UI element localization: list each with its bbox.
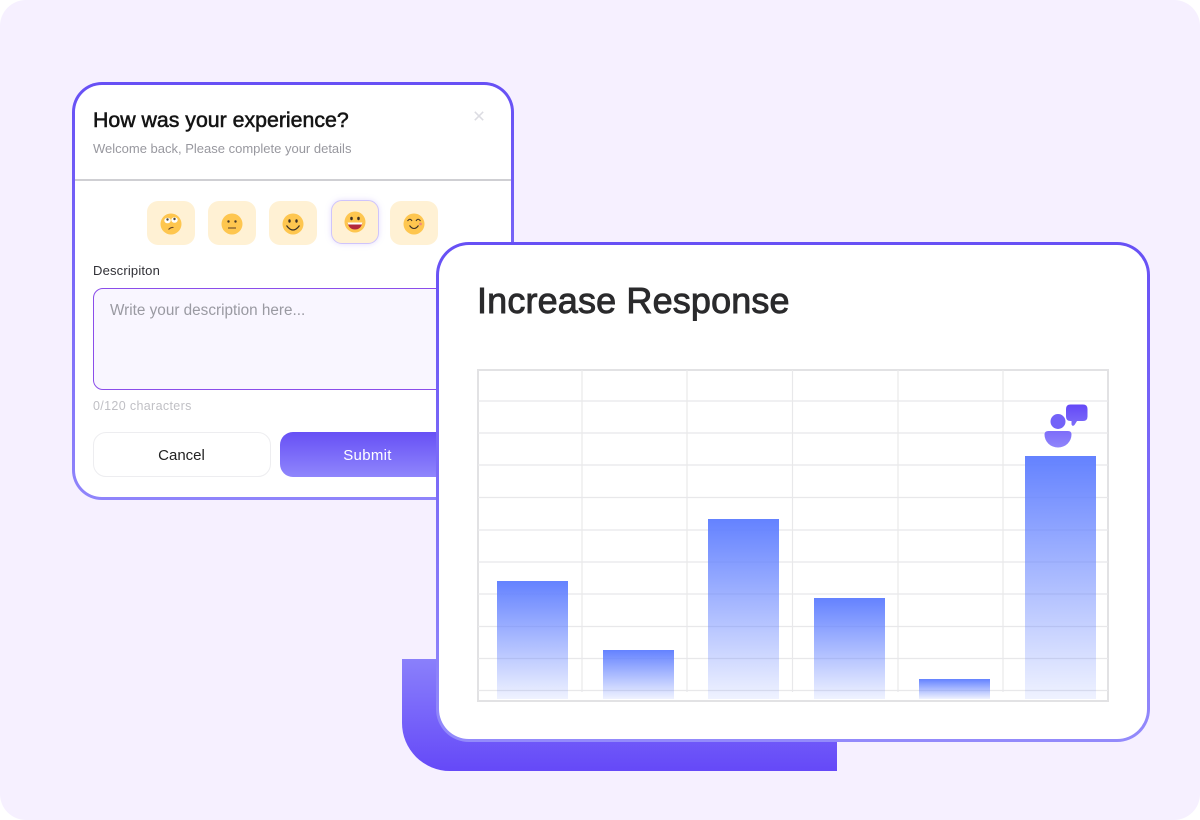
placeholder text: Write your description here... [110,302,305,319]
emoji: rolling eyes [147,201,195,245]
icon: person with speech bubble [1044,404,1088,448]
bar 3 [708,519,778,699]
bar 6 [1025,456,1096,699]
cancel button [93,432,271,477]
emoji: blushing [390,201,438,245]
panel: increase response [436,242,1150,742]
submit button [280,432,455,477]
submit label: Submit [343,447,392,464]
bar chart [477,369,1109,702]
bar 5 [919,679,990,699]
form subheading: Welcome back, Please complete your details [93,141,351,156]
panel: feedback form [72,82,514,500]
emoji: neutral [208,201,256,245]
bar 2 [603,650,674,699]
description label: Descripiton [93,263,160,278]
icon: close [474,112,484,120]
chart title: Increase Response [477,280,790,320]
cancel label: Cancel [158,447,205,464]
description textarea [93,288,453,390]
bar 1 [497,581,568,699]
decorative purple backing shape [402,659,837,771]
bar 4 [814,598,884,699]
emoji: smile [269,201,317,245]
character counter: 0/120 characters [93,399,192,413]
emoji: grin, selected [331,200,379,244]
form heading: How was your experience? [93,108,349,132]
form divider [75,179,511,181]
